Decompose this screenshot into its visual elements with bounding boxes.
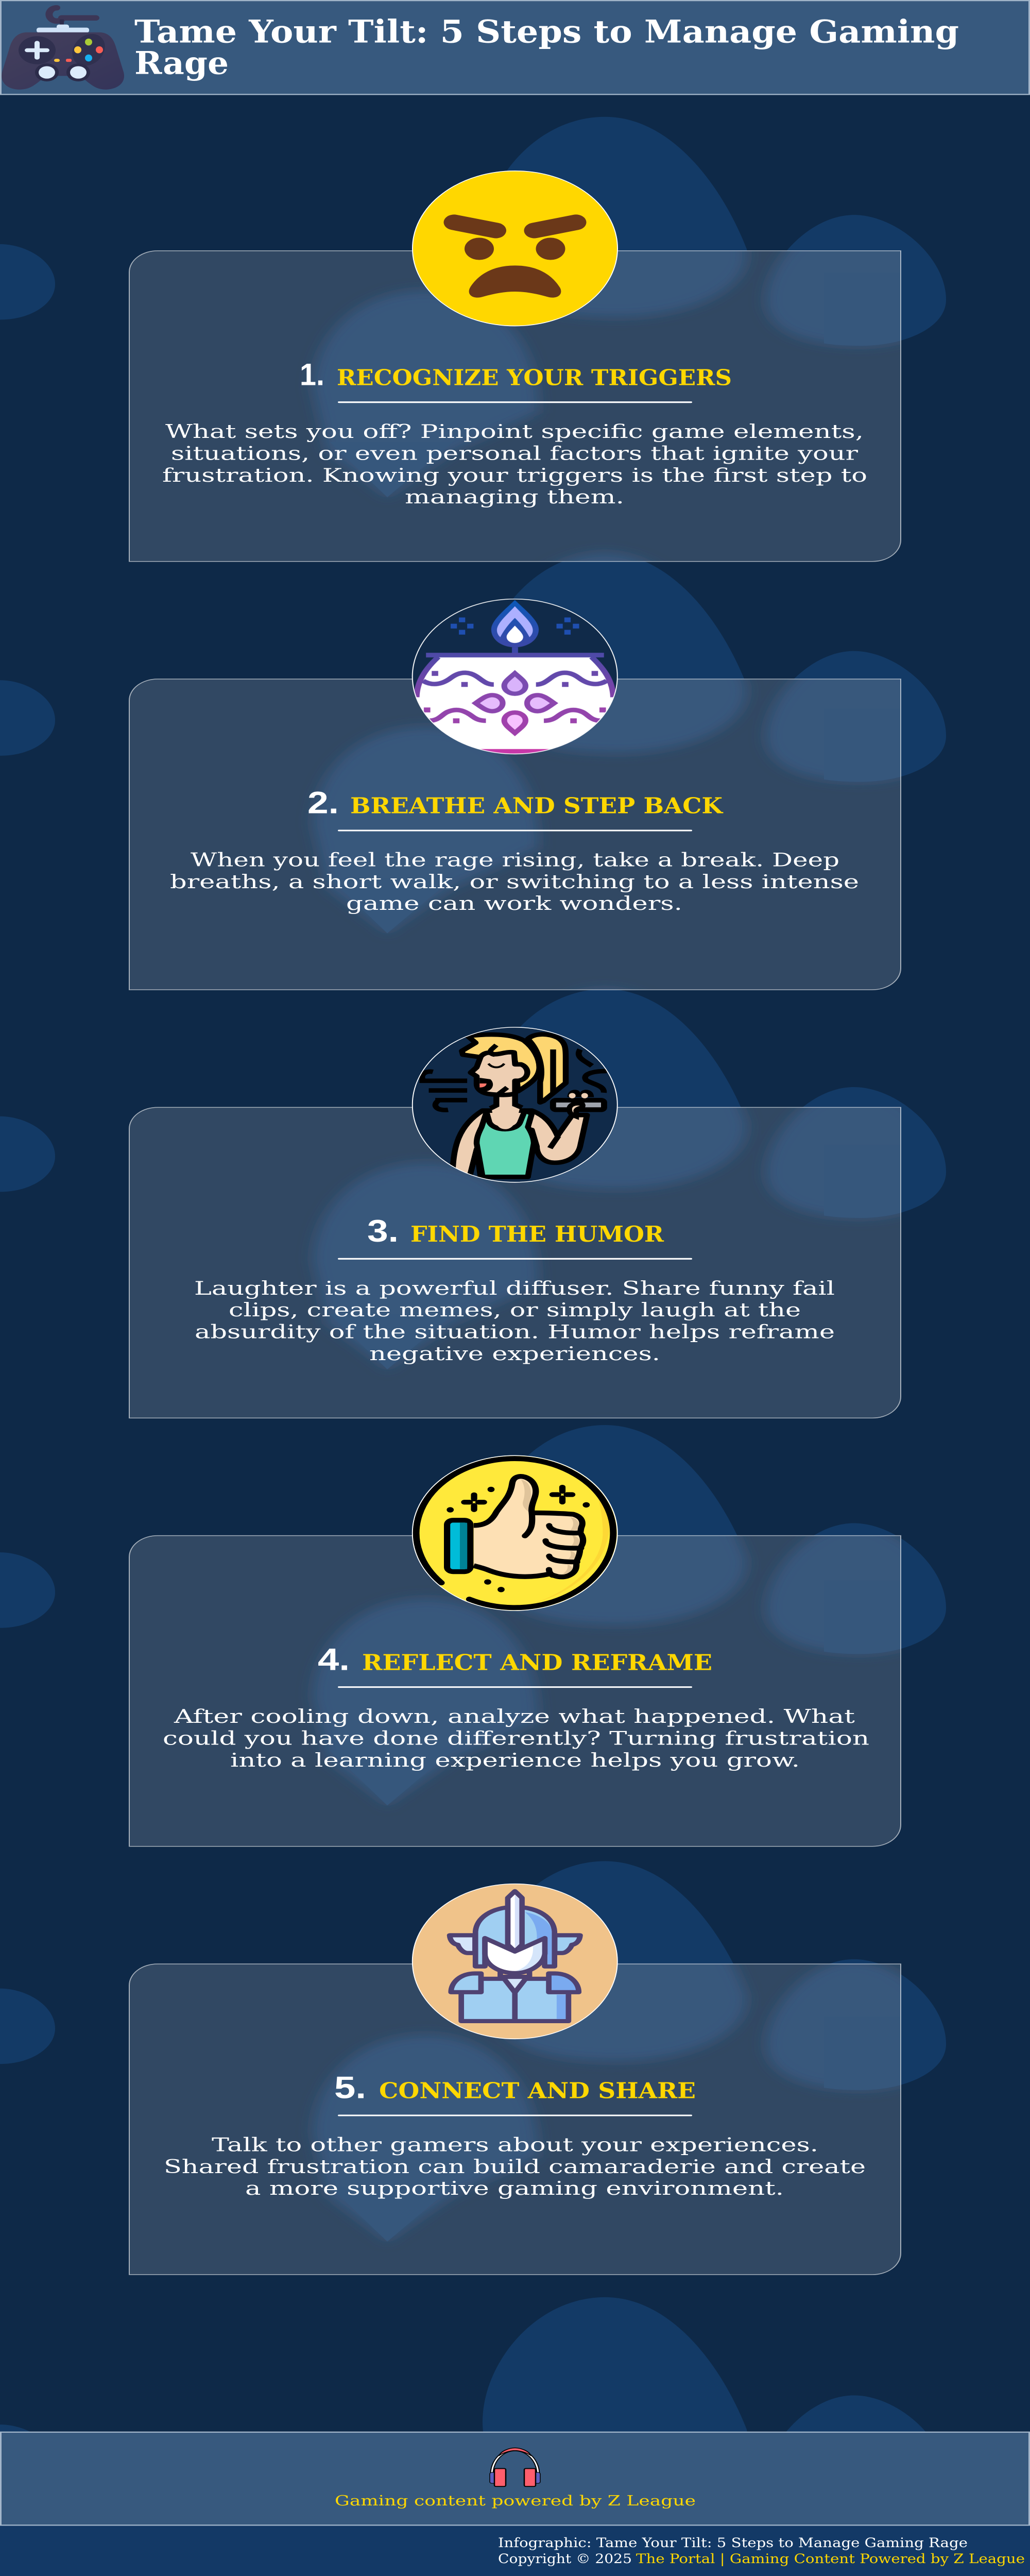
step 3 description: clips, create memes, or simply laugh at the: [229, 1300, 801, 1321]
step 1 description: managing them.: [405, 487, 624, 509]
step 5 description: a more supportive gaming environment.: [245, 2178, 784, 2200]
step 1 description: frustration. Knowing your triggers is the first step to: [162, 465, 867, 486]
step 4 heading: REFLECT AND REFRAME: [362, 1649, 712, 1675]
step 4 description: After cooling down, analyze what happened. What: [174, 1706, 855, 1728]
panel: step 3: [129, 1027, 901, 1419]
copyright text: Infographic: Tame Your Tilt: 5 Steps to Manage Gaming Rage: [498, 2535, 968, 2550]
step 3 heading: 3.: [367, 1214, 399, 1249]
step 1 heading: RECOGNIZE YOUR TRIGGERS: [337, 364, 732, 391]
step 4 description: could you have done differently? Turning frustration: [163, 1728, 869, 1750]
header bar: [1, 1, 1029, 94]
footer credit: Gaming content powered by Z League: [335, 2493, 696, 2509]
step 2 heading: BREATHE AND STEP BACK: [350, 793, 724, 819]
step 2 heading: 2.: [307, 786, 339, 820]
step 4 heading: [318, 1642, 712, 1677]
step 5 heading: CONNECT AND SHARE: [379, 2078, 696, 2104]
step 4 heading: 4.: [318, 1642, 350, 1677]
panel: step 1: [129, 171, 901, 562]
panel: step 5: [129, 1884, 901, 2275]
panel: step 4: [129, 1455, 901, 1846]
icon: angry face: [413, 171, 617, 326]
icon: woman exhaling: [409, 1026, 621, 1183]
step 3 heading: FIND THE HUMOR: [410, 1221, 664, 1247]
title: Rage: [134, 44, 229, 81]
step 2 description: [170, 850, 859, 915]
step 1 description: What sets you off? Pinpoint specific game elements,: [165, 421, 864, 443]
step 1 heading: 1.: [300, 358, 324, 392]
step 5 description: Talk to other gamers about your experiences.: [212, 2134, 818, 2156]
step 3 description: negative experiences.: [369, 1343, 660, 1365]
step 1 description: situations, or even personal factors that ignite your: [171, 443, 859, 465]
copyright text: Copyright © 2025: [498, 2551, 632, 2566]
step 2 description: game can work wonders.: [346, 893, 682, 915]
icon: oil lamp: [409, 597, 621, 757]
icon: game controller: [2, 8, 124, 90]
step 5 heading: 5.: [334, 2071, 366, 2105]
icon: knight: [412, 1884, 617, 2039]
icon: headphones: [490, 2448, 540, 2486]
step 2 description: When you feel the rage rising, take a break. Deep: [191, 850, 839, 871]
step 3 description: absurdity of the situation. Humor helps reframe: [195, 1321, 835, 1343]
icon: thumbs up: [412, 1455, 617, 1611]
step 4 description: [163, 1706, 869, 1771]
step 5 description: [164, 2134, 866, 2200]
step 3 description: Laughter is a powerful diffuser. Share funny fail: [194, 1278, 835, 1299]
step 5 description: Shared frustration can build camaraderie and create: [164, 2156, 866, 2178]
copyright text: [498, 2535, 1025, 2566]
step 5 heading: [334, 2071, 696, 2105]
title: [134, 13, 959, 81]
panel: step 2: [129, 679, 901, 990]
bottom strip: [0, 2526, 1030, 2576]
step 4 description: into a learning experience helps you grow.: [230, 1750, 800, 1771]
step 3 heading: [367, 1214, 664, 1249]
step 1 description: [162, 421, 867, 509]
step 2 description: breaths, a short walk, or switching to a less intense: [170, 871, 859, 893]
step 3 description: [194, 1278, 835, 1365]
step 1 heading: [300, 358, 732, 392]
footer panel: [1, 2432, 1029, 2525]
step 2 heading: [307, 786, 724, 820]
